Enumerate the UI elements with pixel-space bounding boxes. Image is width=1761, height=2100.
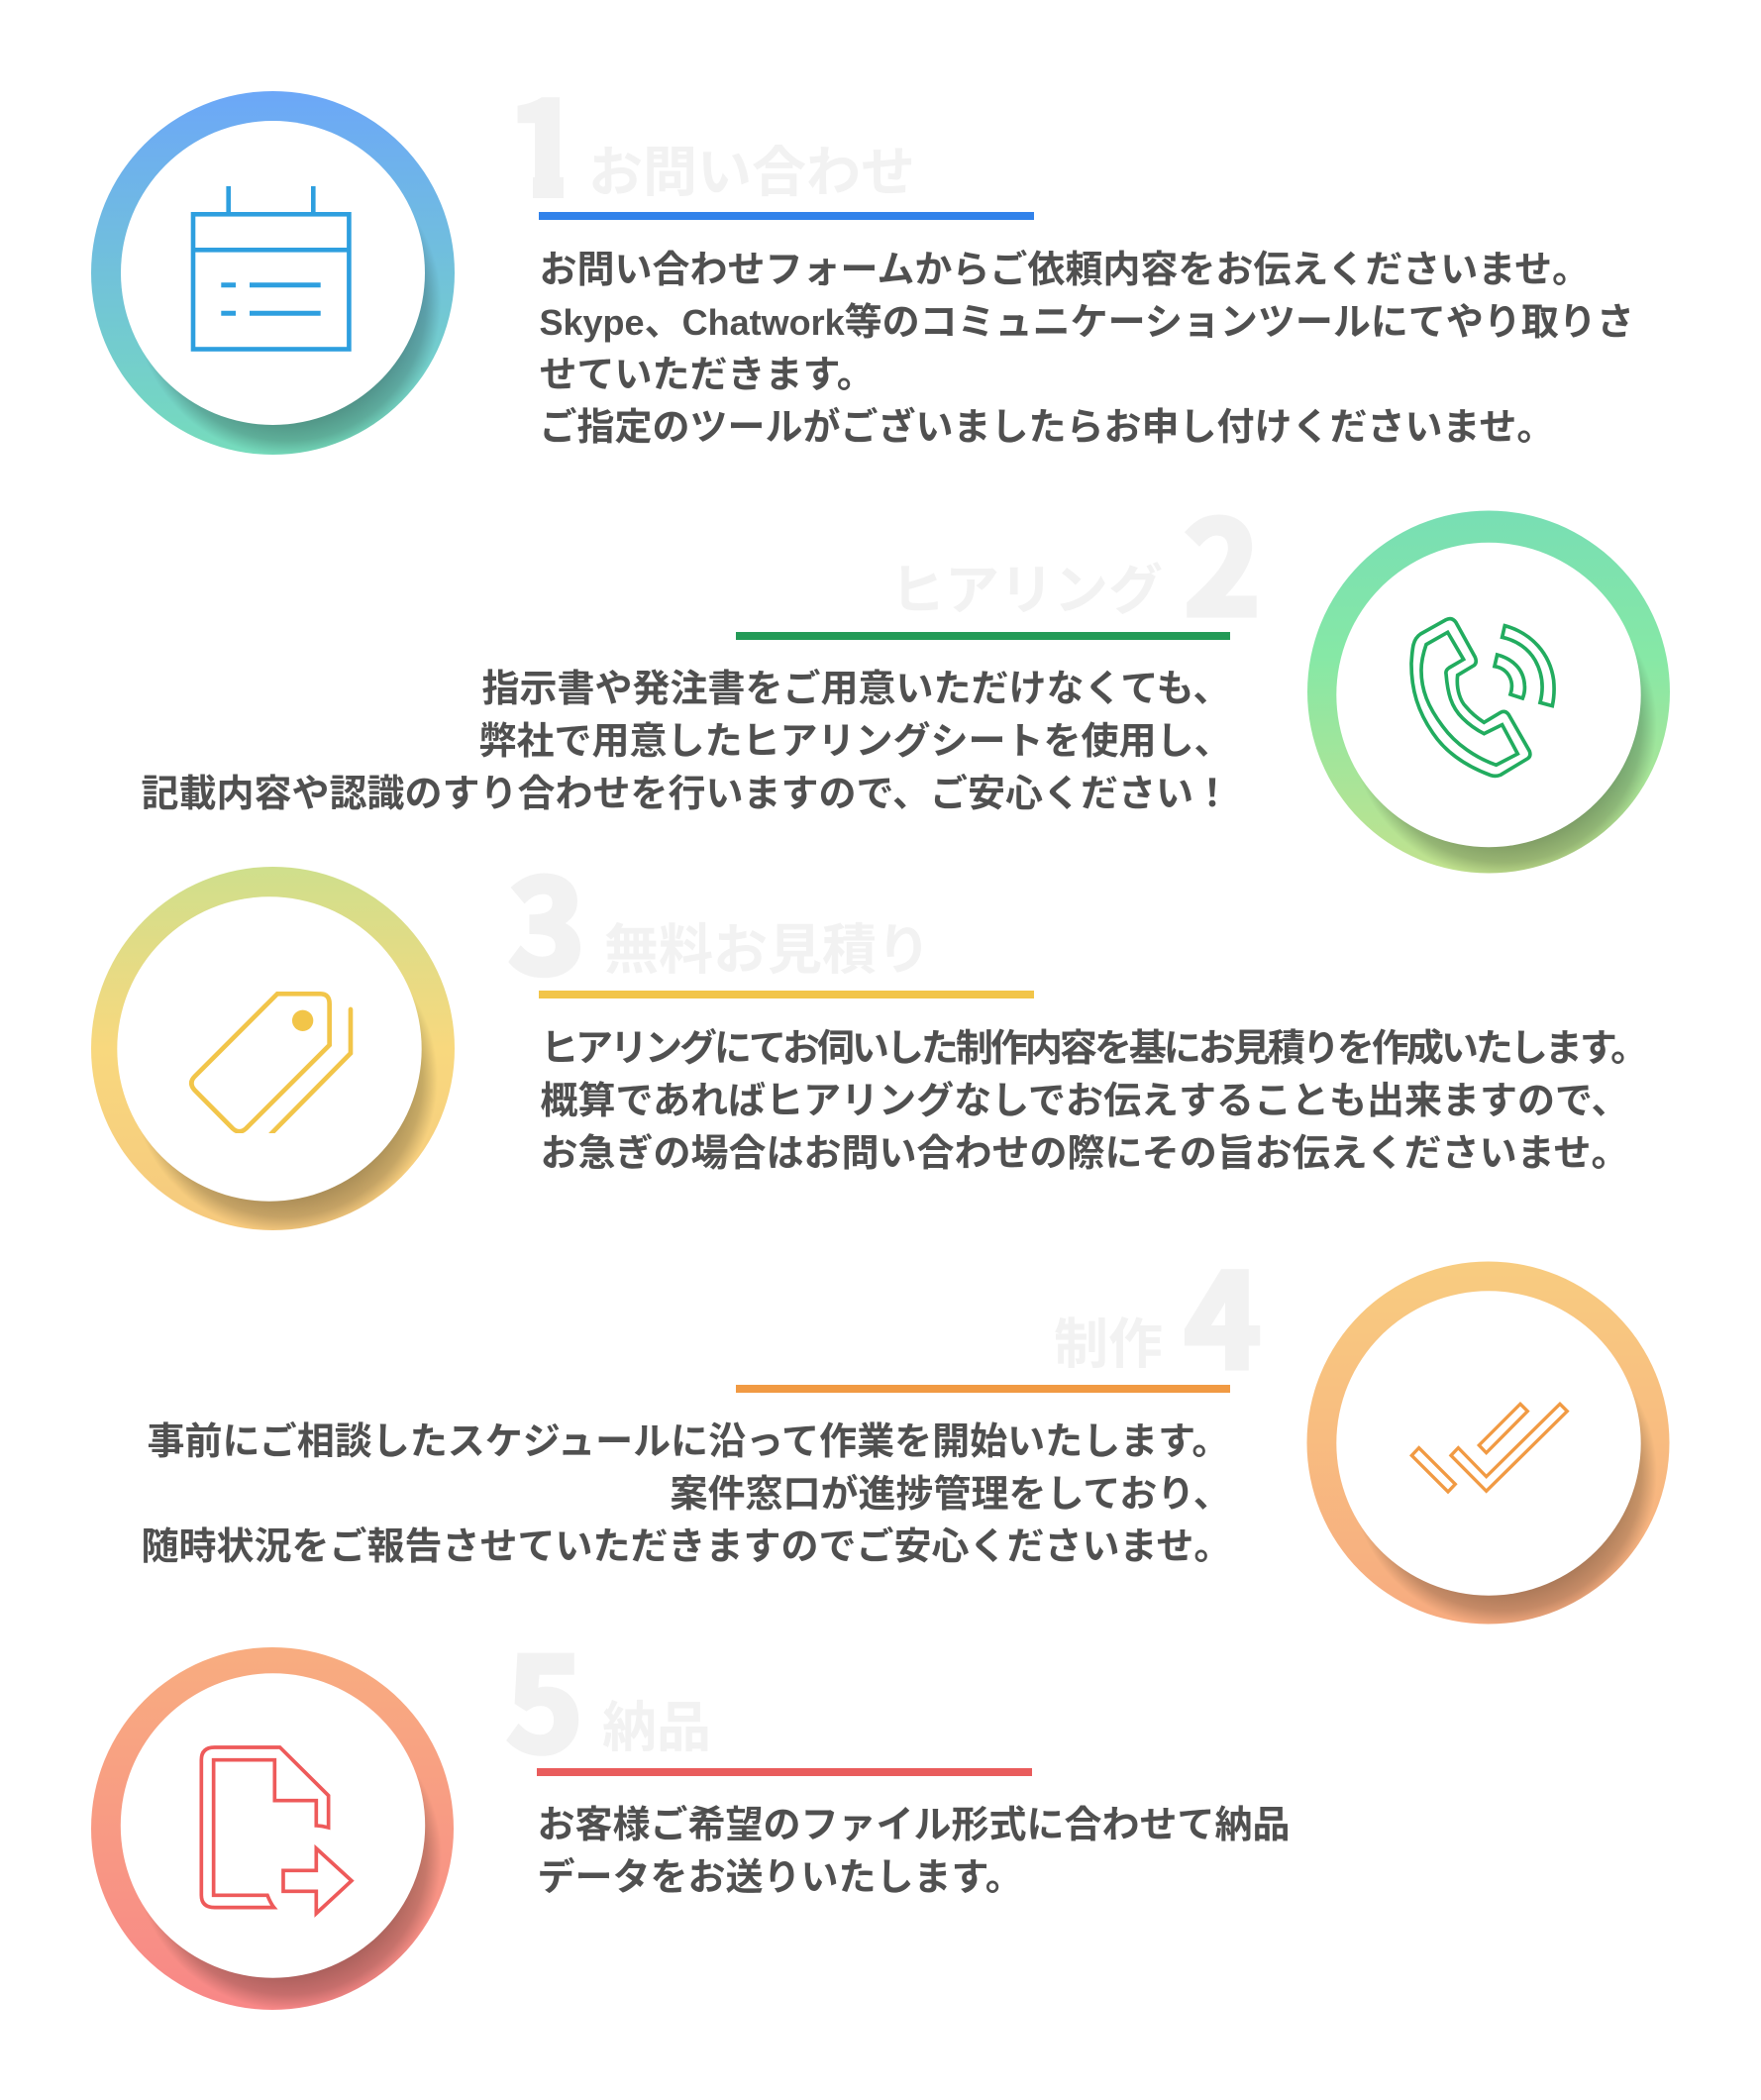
bar <box>539 212 1034 220</box>
step 5 ring <box>91 1647 454 2010</box>
text: step 2 body: 記載内容や認識のすり合わせを行いますので、ご安心ください！ <box>141 774 1231 815</box>
text: step 1 body: お問い合わせフォームからご依頼内容をお伝えくださいませ。 <box>539 250 1590 291</box>
step 2 <box>141 466 1670 878</box>
text: step 1 body: せていただきます。 <box>539 355 875 396</box>
step 1 ring <box>91 91 455 456</box>
text: step 3 body: お急ぎの場合はお問い合わせの際にその旨お伝えくださいませ。 <box>541 1133 1628 1175</box>
icon: phone <box>1411 619 1554 776</box>
text: step 3 body: 概算であればヒアリングなしでお伝えすることも出来ますので、 <box>541 1081 1628 1122</box>
step 3 <box>91 824 1645 1232</box>
step 4 <box>144 1262 1670 1625</box>
text: step 4 body <box>141 1421 1231 1568</box>
text: step 3 body: ヒアリングにてお伺いした制作内容を基にお見積りを作成いたします。 <box>541 1028 1645 1070</box>
heading: hearing: ヒアリング <box>890 560 1163 621</box>
number 1: 1 <box>507 48 582 234</box>
number 4: 4 <box>1185 1218 1261 1405</box>
text: step 4 body: 随時状況をご報告させていただきますのでご安心くださいませ。 <box>141 1526 1231 1568</box>
text: step 2 body: 弊社で用意したヒアリングシートを使用し、 <box>479 721 1232 763</box>
bar <box>537 1768 1032 1776</box>
bar <box>736 632 1230 640</box>
heading: production: 制作 <box>1054 1313 1163 1375</box>
bar <box>539 991 1034 998</box>
text: step 5 body: データをお送りいたします。 <box>537 1856 1023 1899</box>
step 5 <box>91 1647 1288 2010</box>
step 2 ring <box>1307 511 1670 878</box>
heading: estimate: 無料お見積り <box>604 919 931 981</box>
text: step 3 body <box>541 1028 1645 1175</box>
icon: price tag <box>191 994 351 1134</box>
heading: delivery: 納品 <box>602 1697 711 1758</box>
text: step 4 body: 案件窓口が進捗管理をしており、 <box>670 1474 1231 1516</box>
icon: file with arrow <box>201 1747 352 1914</box>
text: step 5 body <box>537 1805 1291 1899</box>
text: step 5 body: お客様ご希望のファイル形式に合わせて納品 <box>537 1805 1291 1846</box>
text: step 2 body <box>141 669 1232 815</box>
text: step 1 body: ご指定のツールがございましたらお申し付けくださいませ。 <box>539 406 1554 449</box>
heading: inquiry: お問い合わせ <box>588 142 915 203</box>
step 3 ring <box>91 867 455 1232</box>
text: step 4 body: 事前にご相談したスケジュールに沿って作業を開始いたします。 <box>147 1421 1229 1463</box>
step 1 <box>91 91 1629 455</box>
icon: calendar <box>193 186 349 349</box>
text: step 1 body <box>539 250 1634 449</box>
number 2: 2 <box>1185 466 1260 652</box>
text: step 2 body: 指示書や発注書をご用意いただけなくても、 <box>481 669 1230 710</box>
icon: double check <box>1411 1404 1567 1492</box>
step 4 ring <box>1307 1262 1670 1627</box>
text: step 1 body: Skype、Chatwork等のコミュニケーションツールにてやり取りさ <box>539 302 1634 344</box>
number 3: 3 <box>509 824 584 1010</box>
number 5: 5 <box>507 1603 582 1789</box>
bar <box>736 1385 1230 1393</box>
